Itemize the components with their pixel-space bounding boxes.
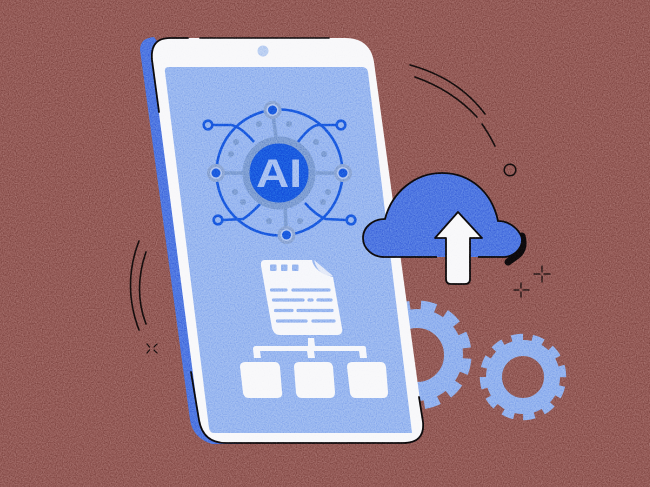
cloud upload icon bbox=[363, 173, 523, 284]
nodes bbox=[208, 102, 350, 242]
phone body bbox=[152, 38, 423, 443]
AI network diagram bbox=[204, 102, 355, 242]
tree connector bbox=[253, 338, 367, 358]
decorative marks bbox=[130, 65, 550, 353]
cloud outline bbox=[363, 173, 522, 257]
AI letters: AI bbox=[256, 152, 302, 196]
document hierarchy bbox=[240, 260, 388, 398]
document tabs bbox=[270, 264, 298, 271]
document page bbox=[261, 260, 342, 335]
left sparkle bbox=[147, 344, 157, 353]
phone bbox=[140, 37, 423, 444]
outer ring bbox=[216, 110, 342, 236]
camera bbox=[258, 46, 268, 56]
gray dots bbox=[228, 121, 331, 224]
document lines bbox=[272, 290, 334, 321]
large gear bbox=[364, 302, 470, 408]
sparkle right bbox=[534, 266, 550, 282]
screen bbox=[165, 67, 412, 433]
page fold bbox=[314, 260, 333, 276]
arrow bbox=[435, 212, 482, 284]
connector curves bbox=[213, 125, 346, 220]
small gear bbox=[476, 330, 570, 424]
phone outline strokes bbox=[152, 38, 423, 443]
gears bbox=[364, 302, 570, 424]
small ring bbox=[504, 164, 516, 176]
phone back edge bbox=[140, 37, 240, 444]
AI badge bbox=[246, 140, 312, 206]
sparkle lower bbox=[514, 283, 529, 297]
tree boxes bbox=[240, 362, 388, 398]
left arcs bbox=[130, 241, 139, 330]
top right arcs bbox=[410, 65, 495, 146]
spokes bbox=[222, 115, 338, 228]
cloud fill bbox=[363, 173, 522, 257]
open end circles bbox=[204, 121, 355, 224]
cloud shadow bbox=[508, 236, 523, 262]
